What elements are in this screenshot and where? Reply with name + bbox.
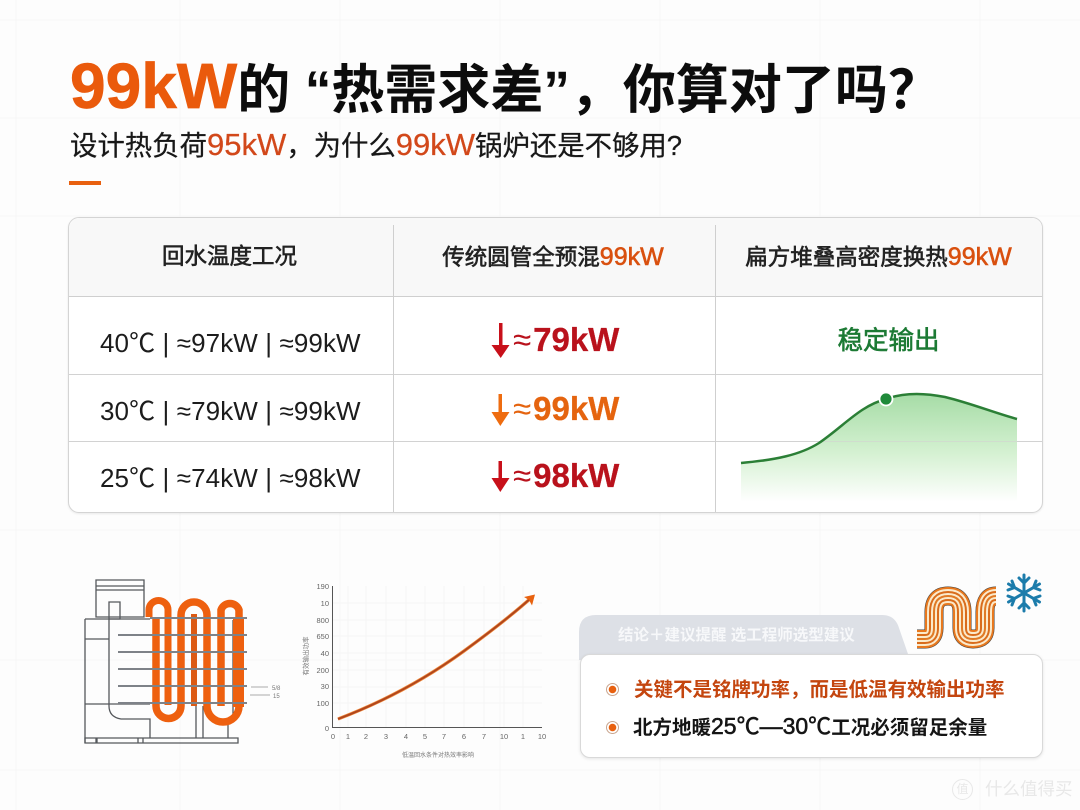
bullet 1 [606, 683, 619, 696]
header: return water temperature: 回水温度工况 [162, 244, 297, 269]
chart: rising performance curve: 10 [500, 732, 508, 741]
chart: rising performance curve: 1 [521, 732, 525, 741]
chart: rising performance curve: 7 [482, 732, 486, 741]
chart: rising performance curve: 0 [331, 732, 335, 741]
chart: rising performance curve: 7 [442, 732, 446, 741]
chart: rising performance curve: 1 [346, 732, 350, 741]
chart: rising performance curve: 0 [325, 724, 329, 733]
column divider two [715, 225, 716, 512]
row label 25C: 25℃ | ≈74kW | ≈98kW [100, 463, 361, 493]
value 98kW: ≈98kW [513, 457, 619, 494]
illustration: heat exchanger: 15 [273, 694, 280, 700]
subtitle: 设计热负荷95kW，为什么99kW锅炉还是不够用? [70, 127, 682, 162]
watermark logo: 值 [956, 782, 968, 796]
row label 40C: 40℃ | ≈97kW | ≈99kW [100, 328, 361, 358]
conclusion tab: 结论＋建议提醒 选工程师选型建议 [618, 625, 855, 644]
chart: rising performance curve: 190 [316, 582, 329, 591]
row label 30C: 30℃ | ≈79kW | ≈99kW [100, 396, 361, 426]
chart: rising performance curve: 2 [364, 732, 368, 741]
comparison table [68, 217, 1043, 514]
row divider one [69, 374, 1042, 375]
chart: rising performance curve: 100 [316, 699, 329, 708]
watermark logo [952, 779, 973, 800]
accent bar [69, 181, 101, 185]
chart: rising performance curve: 6 [462, 732, 466, 741]
chart: rising performance curve: 10 [321, 599, 329, 608]
chart: rising performance curve: 低温回水条件对热效率影响 [402, 751, 474, 759]
chart: rising performance curve: 650 [316, 632, 329, 641]
bullet 2 [606, 721, 619, 734]
conclusion text 1: 关键不是铭牌功率，而是低温有效输出功率 [634, 679, 1005, 701]
value 79kW: ≈79kW [513, 321, 619, 358]
value 99kW: ≈99kW [513, 390, 619, 427]
chart: rising performance curve: 40 [321, 649, 329, 658]
stable output label: 稳定输出 [837, 327, 940, 355]
table frame [68, 217, 1043, 513]
title: 99kW的 “热需求差”，你算对了吗？ [70, 50, 941, 122]
chart: rising performance curve: 有效输出功率 [301, 636, 310, 676]
chart: rising performance curve: 30 [321, 682, 329, 691]
illustration: heat exchanger: 5/8 [272, 686, 281, 692]
chart: rising performance curve: 3 [384, 732, 388, 741]
chart: rising performance curve: 800 [316, 616, 329, 625]
header: flat stacked: 扁方堆叠高密度换热99kW [745, 243, 1012, 271]
chart: rising performance curve: 4 [404, 732, 408, 741]
column divider one [393, 225, 394, 512]
watermark text: 什么值得买 [985, 779, 1072, 799]
conclusion panel [580, 654, 1043, 758]
table header background [69, 218, 1042, 297]
watermark [952, 779, 1072, 800]
chart: rising performance curve: 10 [538, 732, 546, 741]
chart: rising performance curve: 200 [316, 666, 329, 675]
header: traditional tube: 传统圆管全预混99kW [442, 243, 664, 271]
chart: rising performance curve: 5 [423, 732, 427, 741]
row divider two [69, 441, 1042, 442]
conclusion text 2: 北方地暖25℃—30℃工况必须留足余量 [633, 713, 987, 739]
